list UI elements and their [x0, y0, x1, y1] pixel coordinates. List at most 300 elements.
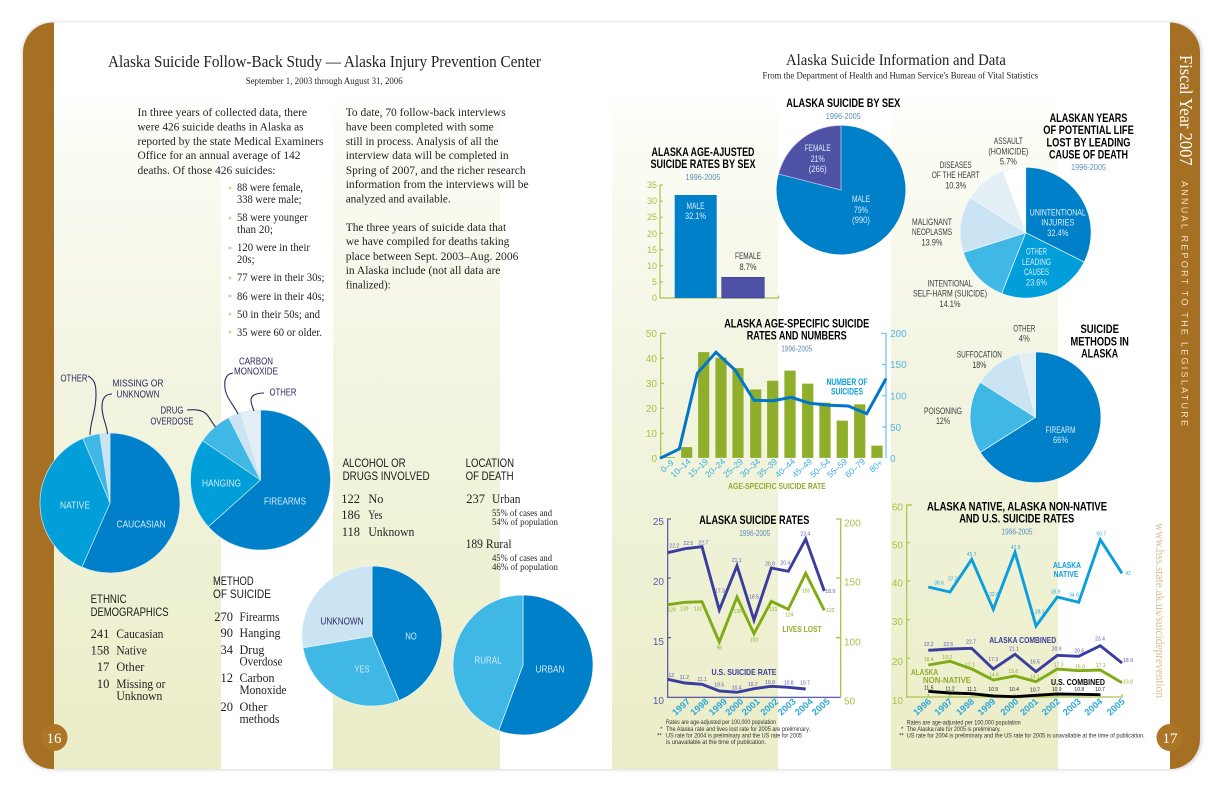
line chart: Alaska suicide rates: 16.5 [749, 594, 759, 600]
line chart: native, non-native and U.S. rates: 11.5 [924, 685, 934, 691]
interviews text block: analyzed and available. [346, 192, 451, 206]
line chart: native, non-native and U.S. rates: 10.4 [1009, 687, 1019, 693]
pie chart: suicide methods in Alaska: ALASKA [1081, 348, 1118, 360]
text block: ethnic demographics: 17 [97, 660, 109, 674]
text block: method of suicide: Carbon [240, 671, 275, 685]
line chart: native, non-native and U.S. rates: 22.7 [966, 640, 976, 646]
line chart: native, non-native and U.S. rates: 13.8 [1123, 680, 1133, 686]
line chart: native, non-native and U.S. rates: NON-NATIVE [923, 675, 971, 685]
line chart: native, non-native and U.S. rates: 2002 [1040, 696, 1062, 717]
text block: location of death: 45% of cases and [492, 553, 552, 563]
line chart: Alaska suicide rates: 10.9 [765, 680, 775, 686]
pie chart: years of potential life lost: 14.1% [940, 299, 960, 309]
line chart: Alaska suicide rates: 11.2 [680, 675, 689, 681]
text block: alcohol or drugs [341, 456, 430, 539]
sidebar subtitle: ANNUAL REPORT TO THE LEGISLATURE [1180, 181, 1190, 426]
line chart: native, non-native and U.S. rates: 1998 [954, 696, 976, 717]
line chart: native, non-native and U.S. rates: NATIVE [1054, 569, 1079, 579]
line chart: Alaska suicide rates: 18.9 [825, 589, 835, 595]
pie chart: suicide methods in Alaska: METHODS IN [1070, 336, 1129, 348]
line chart: native, non-native and U.S. rates: 34.6 [1069, 593, 1079, 599]
line chart: native, non-native and U.S. rates [892, 502, 1133, 717]
bar chart: age-adjusted rates by sex: ALASKA AGE-AJUSTED [652, 147, 754, 159]
intro text block [138, 105, 324, 177]
line chart: Alaska suicide rates: U.S. SUICIDE RATE [712, 667, 777, 677]
line chart: native, non-native and U.S. rates: 19.2 [942, 655, 952, 661]
line chart: native, non-native and U.S. rates: 10 [892, 696, 903, 707]
text block: method of suicide: METHOD [213, 574, 254, 588]
line chart: native, non-native and U.S. rates: 11.1 [967, 687, 977, 693]
line chart: Alaska suicide rates: 135 [734, 609, 742, 615]
pie chart: ethnic demographics: CAUCASIAN [116, 520, 166, 530]
pie chart: years of potential life lost: OTHER [1026, 247, 1047, 257]
pie chart: years of potential life lost: OF POTENTIAL LIFE [1043, 125, 1134, 137]
line chart: native, non-native and U.S. rates: 22.5 [943, 642, 953, 648]
combo chart: age-specific rates and numbers: AGE-SPECIFIC SUICIDE RATE [728, 481, 826, 491]
combo chart: age-specific rates and numbers: 10 [646, 429, 657, 440]
line chart: native, non-native and U.S. rates: 20 [892, 657, 903, 668]
line chart: native, non-native and U.S. rates: 20.6 [1074, 648, 1084, 654]
footnotes: Alaska suicide rates [657, 719, 810, 746]
text block: location of death: 237 [466, 492, 485, 506]
bar chart: age-adjusted rates by sex: SUICIDE RATES BY SEX [650, 159, 756, 171]
line chart: native, non-native and U.S. rates: 37.2 [948, 576, 958, 582]
pie chart: location of death: RURAL [474, 656, 502, 666]
text block: method of suicide: 90 [220, 626, 233, 640]
line chart: native, non-native and U.S. rates: 18.9 [1123, 658, 1133, 664]
intro text block: Office for an annual average of 142 [138, 148, 300, 162]
interviews text block: in Alaska include (not all data are [346, 263, 500, 277]
text block: ethnic demographics: Unknown [116, 689, 163, 703]
line chart: Alaska suicide rates: 1996-2005 [739, 528, 770, 538]
text block: method of suicide: methods [240, 712, 280, 726]
line chart: Alaska suicide rates: LIVES LOST [782, 624, 822, 634]
interviews text block [346, 105, 529, 292]
bullet list [228, 182, 324, 339]
line chart: native, non-native and U.S. rates: 10.8 [1074, 687, 1084, 693]
interviews text block: we have compiled for deaths taking [346, 234, 509, 248]
line chart: Alaska suicide rates: 22.5 [683, 541, 693, 547]
line chart: native, non-native and U.S. rates: 20.9 [1052, 647, 1062, 653]
page number 17 [1156, 724, 1184, 751]
pie chart: suicide by sex [777, 98, 906, 254]
combo chart: age-specific rates and numbers: 20 [646, 404, 657, 415]
bullet list: 88 were female, [237, 182, 303, 194]
text block: method of suicide: 34 [220, 643, 234, 657]
line chart: native, non-native and U.S. rates: 10.9 [1052, 687, 1062, 693]
text block: ethnic demographics: Other [116, 660, 145, 674]
interviews text block: Spring of 2007, and the richer research [346, 163, 526, 177]
pie chart: suicide by sex: MALE [852, 194, 870, 204]
text block: ethnic demographics [91, 592, 169, 703]
combo chart: age-specific rates and numbers: 15–19 [686, 456, 710, 480]
pie chart: method of suicide [190, 410, 331, 550]
pie chart: years of potential life lost: 23.6% [1026, 278, 1047, 288]
interviews text block: place between Sept. 2003–Aug. 2006 [346, 249, 518, 263]
line chart: native, non-native and U.S. rates: 2004 [1083, 696, 1105, 717]
pie chart: alcohol or drugs: UNKNOWN [320, 616, 364, 628]
line chart: Alaska suicide rates: 1999 [707, 696, 729, 717]
pie chart: suicide by sex: ALASKA SUICIDE BY SEX [786, 98, 901, 110]
text block: ethnic demographics: DEMOGRAPHICS [91, 605, 169, 619]
line chart: native, non-native and U.S. rates: 17.3 [988, 657, 998, 663]
right brown sidebar [1170, 22, 1200, 769]
line chart: Alaska suicide rates: 130 [680, 606, 689, 612]
pie chart: years of potential life lost: LEADING [1022, 257, 1051, 267]
footnotes: Alaska suicide rates: is unavailable at the time of publication. [666, 739, 766, 746]
line chart: native, non-native and U.S. rates: AND U.S. SUICIDE RATES [959, 514, 1074, 526]
pie chart: years of potential life lost: DISEASES [940, 160, 972, 170]
combo chart: age-specific rates and numbers: 20–24 [703, 456, 727, 480]
pie chart: suicide by sex: (266) [809, 164, 827, 174]
line chart: Alaska suicide rates: 15 [653, 637, 664, 648]
text block: location of death: Urban [492, 492, 521, 506]
line chart: native, non-native and U.S. rates: ALASKA [1053, 560, 1081, 570]
text block: alcohol or drugs: 186 [341, 508, 360, 522]
combo chart: age-specific rates and numbers: 1996-2005 [781, 344, 812, 354]
interviews text block: interview data will be completed in [346, 148, 509, 162]
pie chart: location of death [453, 595, 593, 735]
text block: location of death: 55% of cases and [492, 508, 552, 518]
line chart: Alaska suicide rates: 128 [668, 608, 676, 614]
line chart: Alaska suicide rates: 23.4 [800, 532, 810, 538]
text block: method of suicide: Overdose [240, 655, 283, 669]
text block: alcohol or drugs: 122 [341, 492, 360, 506]
line chart: native, non-native and U.S. rates: 18.4 [924, 657, 934, 663]
page number 17: 17 [1162, 731, 1178, 747]
line chart: Alaska suicide rates: 20.4 [780, 561, 790, 567]
footnotes: native and non-native rates: The Alaska rate for 2005 is preliminary. [907, 726, 1001, 733]
combo chart: age-specific rates and numbers: 25–29 [721, 456, 745, 480]
pie chart: years of potential life lost: (HOMICIDE) [988, 146, 1028, 156]
website url: www.hss.state.ak.us/suicideprevention [1153, 523, 1168, 698]
combo chart: age-specific rates and numbers: 35–39 [755, 456, 779, 480]
bar chart: age-adjusted rates by sex: 32.1% [685, 211, 706, 221]
pie chart: suicide by sex: FEMALE [805, 143, 831, 153]
line chart: native, non-native and U.S. rates: ALASKA NATIVE, ALASKA NON-NATIVE [927, 502, 1107, 514]
line chart: Alaska suicide rates: 22.7 [698, 540, 708, 546]
combo chart: age-specific rates and numbers: 45–49 [790, 456, 814, 480]
line chart: Alaska suicide rates: 2005 [810, 696, 832, 717]
text block: location of death: OF DEATH [466, 469, 514, 483]
line chart: native, non-native and U.S. rates: U.S. COMBINED [1051, 677, 1105, 687]
page number 16 [40, 724, 68, 751]
line chart: Alaska suicide rates: 96 [717, 646, 722, 652]
pie chart: suicide methods in Alaska [924, 323, 1129, 483]
line chart: native, non-native and U.S. rates: 10.7 [1095, 687, 1105, 693]
intro text block: were 426 suicide deaths in Alaska as [138, 120, 304, 134]
pie chart: suicide by sex: 21% [811, 154, 825, 164]
bullet list: 58 were younger [237, 212, 308, 224]
left page subtitle: September 1, 2003 through August 31, 2006 [246, 76, 403, 86]
pie chart: years of potential life lost: MALIGNANT [912, 217, 952, 227]
interviews text block: To date, 70 follow-back interviews [346, 105, 506, 119]
text block: method of suicide: 12 [220, 671, 233, 685]
line chart: native, non-native and U.S. rates: 40 [892, 578, 903, 590]
pie chart: ethnic demographics: NATIVE [60, 500, 90, 512]
line chart: native, non-native and U.S. rates: 21.1 [1009, 647, 1019, 653]
method pie callouts: MONOXIDE [234, 366, 278, 378]
pie chart: years of potential life lost [912, 113, 1134, 309]
pie chart: location of death: URBAN [536, 664, 564, 676]
pie chart: suicide methods in Alaska: POISONING [924, 406, 962, 416]
pie chart: method of suicide: HANGING [202, 478, 241, 490]
line chart: native, non-native and U.S. rates: 1999 [976, 696, 997, 717]
bar chart: age-adjusted rates by sex: 10 [647, 261, 657, 271]
combo chart: age-specific rates and numbers: 0 [651, 454, 657, 465]
page number 16: 16 [46, 731, 62, 747]
line chart: Alaska suicide rates: 2004 [793, 696, 815, 717]
interviews text block: The three years of suicide data that [346, 220, 507, 234]
footnotes: Alaska suicide rates: Rates are age-adjusted per 100,000 population [666, 719, 776, 726]
line chart: Alaska suicide rates: 131 [694, 606, 702, 612]
line chart: Alaska suicide rates: 2000 [724, 696, 745, 717]
pie chart: suicide methods in Alaska: SUICIDE [1080, 324, 1119, 336]
pie chart: suicide methods in Alaska: 12% [936, 416, 950, 426]
line chart: native, non-native and U.S. rates: ALASKA [911, 667, 938, 677]
ethnic pie callouts: MISSING OR [112, 378, 164, 390]
bar chart: age-adjusted rates by sex: 8.7% [740, 262, 756, 272]
line chart: native, non-native and U.S. rates: 2000 [999, 696, 1020, 717]
interviews text block: information from the interviews will be [346, 177, 529, 191]
line chart: Alaska suicide rates: 1997 [670, 696, 692, 717]
method pie callouts: OVERDOSE [150, 416, 194, 428]
method pie callouts [150, 356, 296, 428]
combo chart: age-specific rates and numbers: 50 [890, 423, 902, 434]
interviews text block: still in process. Analysis of all the [346, 134, 498, 148]
bullet list: 35 were 60 or older. [237, 327, 322, 339]
pie chart: ethnic demographics [40, 433, 180, 573]
text block: location of death: LOCATION [466, 456, 514, 470]
line chart: native, non-native and U.S. rates: 45.7 [967, 552, 977, 558]
combo chart: age-specific rates and numbers: RATES AND NUMBERS [747, 330, 847, 342]
pie chart: years of potential life lost: UNINTENTIONAL [1030, 207, 1086, 217]
line chart: native, non-native and U.S. rates: 16.5 [1030, 659, 1040, 665]
text block: method of suicide: 270 [214, 610, 233, 624]
footnotes: Alaska suicide rates: The Alaska rate and lives lost rate for 2005 are preliminary. [666, 726, 810, 733]
footnotes: native and non-native rates: * [901, 726, 904, 733]
bullet list: 338 were male; [237, 194, 302, 206]
bar chart: age-adjusted rates by sex: MALE [686, 201, 704, 211]
line chart: Alaska suicide rates: 10.7 [800, 681, 810, 687]
bullet list: 20s; [237, 254, 255, 266]
pie chart: suicide methods in Alaska: 66% [1053, 435, 1068, 445]
text block: alcohol or drugs: DRUGS INVOLVED [343, 469, 430, 483]
text block: ethnic demographics: ETHNIC [91, 592, 127, 606]
bar chart: age-adjusted rates by sex: 25 [647, 212, 657, 222]
ethnic pie callouts [60, 374, 164, 435]
line chart: Alaska suicide rates: 10.7 [748, 682, 758, 688]
line chart: native, non-native and U.S. rates: 22.2 [924, 642, 934, 648]
pie chart: years of potential life lost: 5.7% [1000, 157, 1017, 167]
pie chart: years of potential life lost: OF THE HEART [932, 170, 980, 180]
left brown sidebar [23, 22, 54, 769]
text block: method of suicide [213, 574, 287, 726]
pie chart: alcohol or drugs [302, 566, 442, 706]
line chart: Alaska suicide rates: ALASKA SUICIDE RATES [699, 515, 810, 527]
pie chart: suicide methods in Alaska: OTHER [1013, 323, 1036, 333]
pie chart: alcohol or drugs: YES [354, 664, 370, 676]
pie chart: years of potential life lost: 10.3% [945, 181, 966, 191]
combo chart: age-specific rates and numbers: SUICIDES [831, 386, 863, 396]
line chart: Alaska suicide rates: 123 [826, 608, 835, 614]
footnotes: native and non-native rates: ** [899, 733, 904, 740]
bullet list: 77 were in their 30s; [237, 272, 324, 284]
combo chart: age-specific rates and numbers: 55–59 [825, 456, 849, 480]
line chart: native, non-native and U.S. rates: 15.6 [1008, 669, 1018, 675]
combo chart: age-specific rates and numbers: 40–44 [773, 456, 797, 480]
intro text block: reported by the state Medical Examiners [138, 134, 324, 148]
text block: ethnic demographics: 241 [91, 627, 109, 641]
line chart: Alaska suicide rates: 21.1 [732, 558, 742, 564]
text block: method of suicide: Other [240, 700, 268, 714]
line chart: Alaska suicide rates: 17.3 [715, 588, 725, 594]
pie chart: years of potential life lost: ALASKAN YEARS [1050, 113, 1128, 125]
line chart: native, non-native and U.S. rates: 2003 [1061, 696, 1083, 717]
combo chart: age-specific rates and numbers: NUMBER OF [826, 377, 868, 387]
text block: method of suicide: Firearms [240, 610, 280, 624]
text block: location of death: 189 Rural [466, 537, 512, 551]
line chart: Alaska suicide rates: 200 [844, 518, 861, 530]
line chart: Alaska suicide rates: 2003 [776, 696, 798, 717]
left page title: Alaska Suicide Follow-Back Study — Alaska Injury Prevention Center [108, 52, 541, 71]
bullet list: 86 were in their 40s; [237, 291, 324, 303]
ethnic pie callouts: OTHER [60, 374, 88, 384]
bar chart: age-adjusted rates by sex: 1996-2005 [686, 172, 721, 182]
method pie callouts: OTHER [270, 388, 296, 398]
pie chart: years of potential life lost: 1996-2005 [1071, 162, 1106, 172]
ethnic pie callouts: UNKNOWN [116, 390, 160, 400]
pie chart: suicide methods in Alaska: FIREARM [1046, 425, 1076, 435]
line chart: Alaska suicide rates: 20.9 [765, 561, 775, 567]
line chart: native, non-native and U.S. rates: 30 [892, 617, 903, 628]
line chart: native, non-native and U.S. rates: 28.3 [1035, 609, 1045, 615]
bullet list: than 20; [237, 224, 273, 236]
text block: alcohol or drugs: 118 [342, 525, 360, 539]
pie chart: suicide methods in Alaska: 18% [972, 360, 986, 370]
line chart: Alaska suicide rates: 155 [802, 589, 810, 595]
line chart: Alaska suicide rates: 150 [844, 578, 861, 588]
line chart: Alaska suicide rates: 10.5 [714, 682, 724, 688]
intro text block: In three years of collected data, there [138, 105, 307, 119]
pie chart: years of potential life lost: 13.9% [922, 238, 942, 248]
text block: alcohol or drugs: Unknown [368, 525, 415, 539]
pie chart: years of potential life lost: NEOPLASMS [912, 227, 952, 237]
line chart: native, non-native and U.S. rates: 16.8 [1075, 665, 1085, 671]
footnotes: native and non-native rates: US rate for 2004 is preliminary and the US rate for 2005 is unavailable at the time of publication. [907, 733, 1145, 740]
bar chart: age-adjusted rates by sex: 30 [647, 196, 657, 206]
combo chart: age-specific rates and numbers: 60–79 [843, 456, 867, 480]
line chart: native, non-native and U.S. rates: 47.5 [1011, 545, 1021, 551]
line chart: native, non-native and U.S. rates: 17.1 [965, 662, 975, 668]
line chart: native, non-native and U.S. rates: 35.9 [1051, 590, 1061, 596]
line chart: Alaska suicide rates: 2001 [740, 696, 762, 717]
combo chart: age-specific rates and numbers: 200 [890, 329, 907, 340]
pie chart: suicide by sex: 79% [854, 205, 868, 215]
line chart: Alaska suicide rates: 10.4 [732, 686, 742, 692]
pie chart: years of potential life lost: CAUSES [1024, 267, 1049, 277]
combo chart: age-specific rates and numbers: 150 [890, 360, 907, 371]
combo chart: age-specific rates and numbers: 30–34 [738, 456, 762, 480]
text block: ethnic demographics: Missing or [116, 677, 166, 691]
footnotes: native and non-native rates [899, 720, 1145, 740]
text block: location of death: 46% of population [492, 562, 558, 572]
text block: ethnic demographics: 158 [91, 644, 109, 658]
bar chart: age-adjusted rates by sex [647, 147, 778, 303]
method pie callouts: CARBON [239, 356, 273, 368]
bar chart: age-adjusted rates by sex: 15 [647, 245, 657, 255]
combo chart: age-specific rates and numbers: ALASKA AGE-SPECIFIC SUICIDE [724, 318, 869, 330]
text block: location of death [466, 456, 558, 572]
pie chart: alcohol or drugs: NO [405, 632, 417, 642]
line chart: Alaska suicide rates: 124 [785, 612, 794, 618]
line chart: native, non-native and U.S. rates: 1996-2005 [1002, 527, 1033, 537]
text block: ethnic demographics: 10 [97, 677, 109, 691]
combo chart: age-specific rates and numbers: 30 [646, 379, 657, 390]
line chart: Alaska suicide rates: 20 [653, 577, 664, 588]
text block: method of suicide: Monoxide [240, 683, 287, 697]
line chart: Alaska suicide rates: 10.8 [784, 680, 794, 686]
line chart: native, non-native and U.S. rates: 23.4 [1095, 637, 1105, 643]
line chart: native, non-native and U.S. rates: 1996 [911, 696, 933, 717]
line chart: native, non-native and U.S. rates: 42 [1125, 571, 1131, 577]
pie chart: years of potential life lost: LOST BY LEADING [1046, 138, 1131, 150]
line chart: native, non-native and U.S. rates: 60 [892, 502, 903, 514]
line chart: Alaska suicide rates: 50 [844, 696, 856, 708]
combo chart: age-specific rates and numbers: 50–54 [808, 456, 832, 480]
bar chart: age-adjusted rates by sex: 20 [647, 229, 657, 239]
bar chart: age-adjusted rates by sex: 5 [652, 277, 657, 287]
line chart: native, non-native and U.S. rates: 11.2 [945, 686, 955, 692]
line chart: native, non-native and U.S. rates: 14.6 [989, 672, 999, 678]
bullet list: 120 were in their [237, 242, 310, 254]
text block: method of suicide: 20 [220, 700, 233, 714]
combo chart: age-specific rates and numbers: 100 [890, 392, 907, 402]
intro text block: deaths. Of those 426 suicides: [138, 163, 276, 177]
footnotes: native and non-native rates: Rates are age-adjusted per 100,000 population [907, 720, 1021, 727]
text block: alcohol or drugs: Yes [368, 508, 382, 522]
line chart: Alaska suicide rates: 2002 [759, 696, 780, 717]
pie chart: suicide by sex: (990) [852, 215, 870, 225]
footnotes: Alaska suicide rates: US rate for 2004 is preliminary and the US rate for 2005 [666, 732, 802, 740]
line chart: Alaska suicide rates: 10 [653, 696, 664, 707]
right page title: Alaska Suicide Information and Data [786, 52, 1006, 69]
pie chart: years of potential life lost: CAUSE OF DEATH [1049, 150, 1128, 162]
pie chart: years of potential life lost: ASSAULT [994, 136, 1023, 146]
bar chart: age-adjusted rates by sex: 35 [647, 180, 657, 190]
line chart: Alaska suicide rates: 12 [669, 673, 674, 679]
bullet list: 50 in their 50s; and [237, 309, 320, 321]
pie chart: years of potential life lost: 32.4% [1047, 228, 1068, 238]
combo chart: age-specific rates and numbers: 50 [646, 329, 657, 340]
combo chart: age-specific rates and numbers: 0–9 [658, 457, 676, 474]
line chart: native, non-native and U.S. rates: 2005 [1105, 696, 1127, 717]
line chart: native, non-native and U.S. rates: ALASKA COMBINED [989, 635, 1056, 645]
line chart: native, non-native and U.S. rates: 14.1 [1030, 675, 1040, 681]
interviews text block: finalized): [346, 278, 391, 292]
footnotes: Alaska suicide rates: ** [657, 732, 662, 740]
text block: alcohol or drugs: No [368, 492, 383, 506]
text block: location of death: 54% of population [492, 517, 558, 527]
pie chart: years of potential life lost: SELF-HARM (SUICIDE) [913, 289, 987, 299]
pie chart: suicide by sex: 1996-2005 [826, 111, 861, 121]
line chart: Alaska suicide rates: 11.1 [697, 677, 707, 683]
line chart: native, non-native and U.S. rates: 10.5 [988, 687, 998, 693]
line chart: native, non-native and U.S. rates: 38.6 [934, 580, 944, 586]
pie chart: years of potential life lost: INJURIES [1041, 218, 1074, 228]
line chart: native, non-native and U.S. rates: 17.1 [1096, 663, 1106, 669]
line chart: Alaska suicide rates: 1998 [689, 696, 710, 717]
